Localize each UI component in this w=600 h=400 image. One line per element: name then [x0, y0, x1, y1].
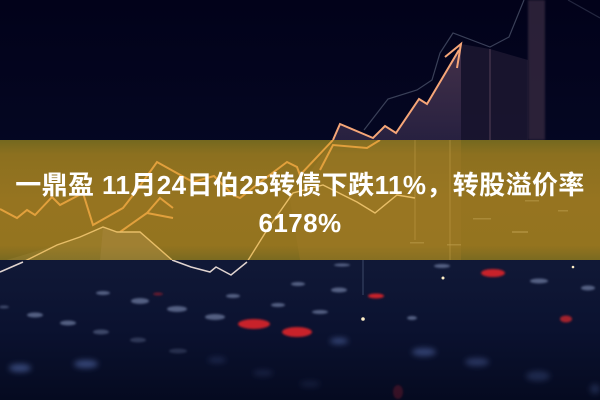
- faint background line: [364, 0, 600, 140]
- cream price line below band: [0, 260, 363, 295]
- small data tick labels: [0, 264, 595, 354]
- chart area fill: [333, 0, 545, 140]
- title band: [0, 140, 600, 260]
- title: 一鼎盈 11月24日伯25转债下跌11%，转股溢价率: [15, 170, 585, 200]
- orange rising arrow line: [333, 44, 461, 140]
- blurred foreground labels: [9, 338, 600, 394]
- chart lines seen through the band: [0, 140, 568, 260]
- title: 6178%: [259, 208, 341, 238]
- title: [15, 170, 585, 238]
- red highlighted labels: [153, 269, 572, 399]
- bright dots: [361, 266, 574, 321]
